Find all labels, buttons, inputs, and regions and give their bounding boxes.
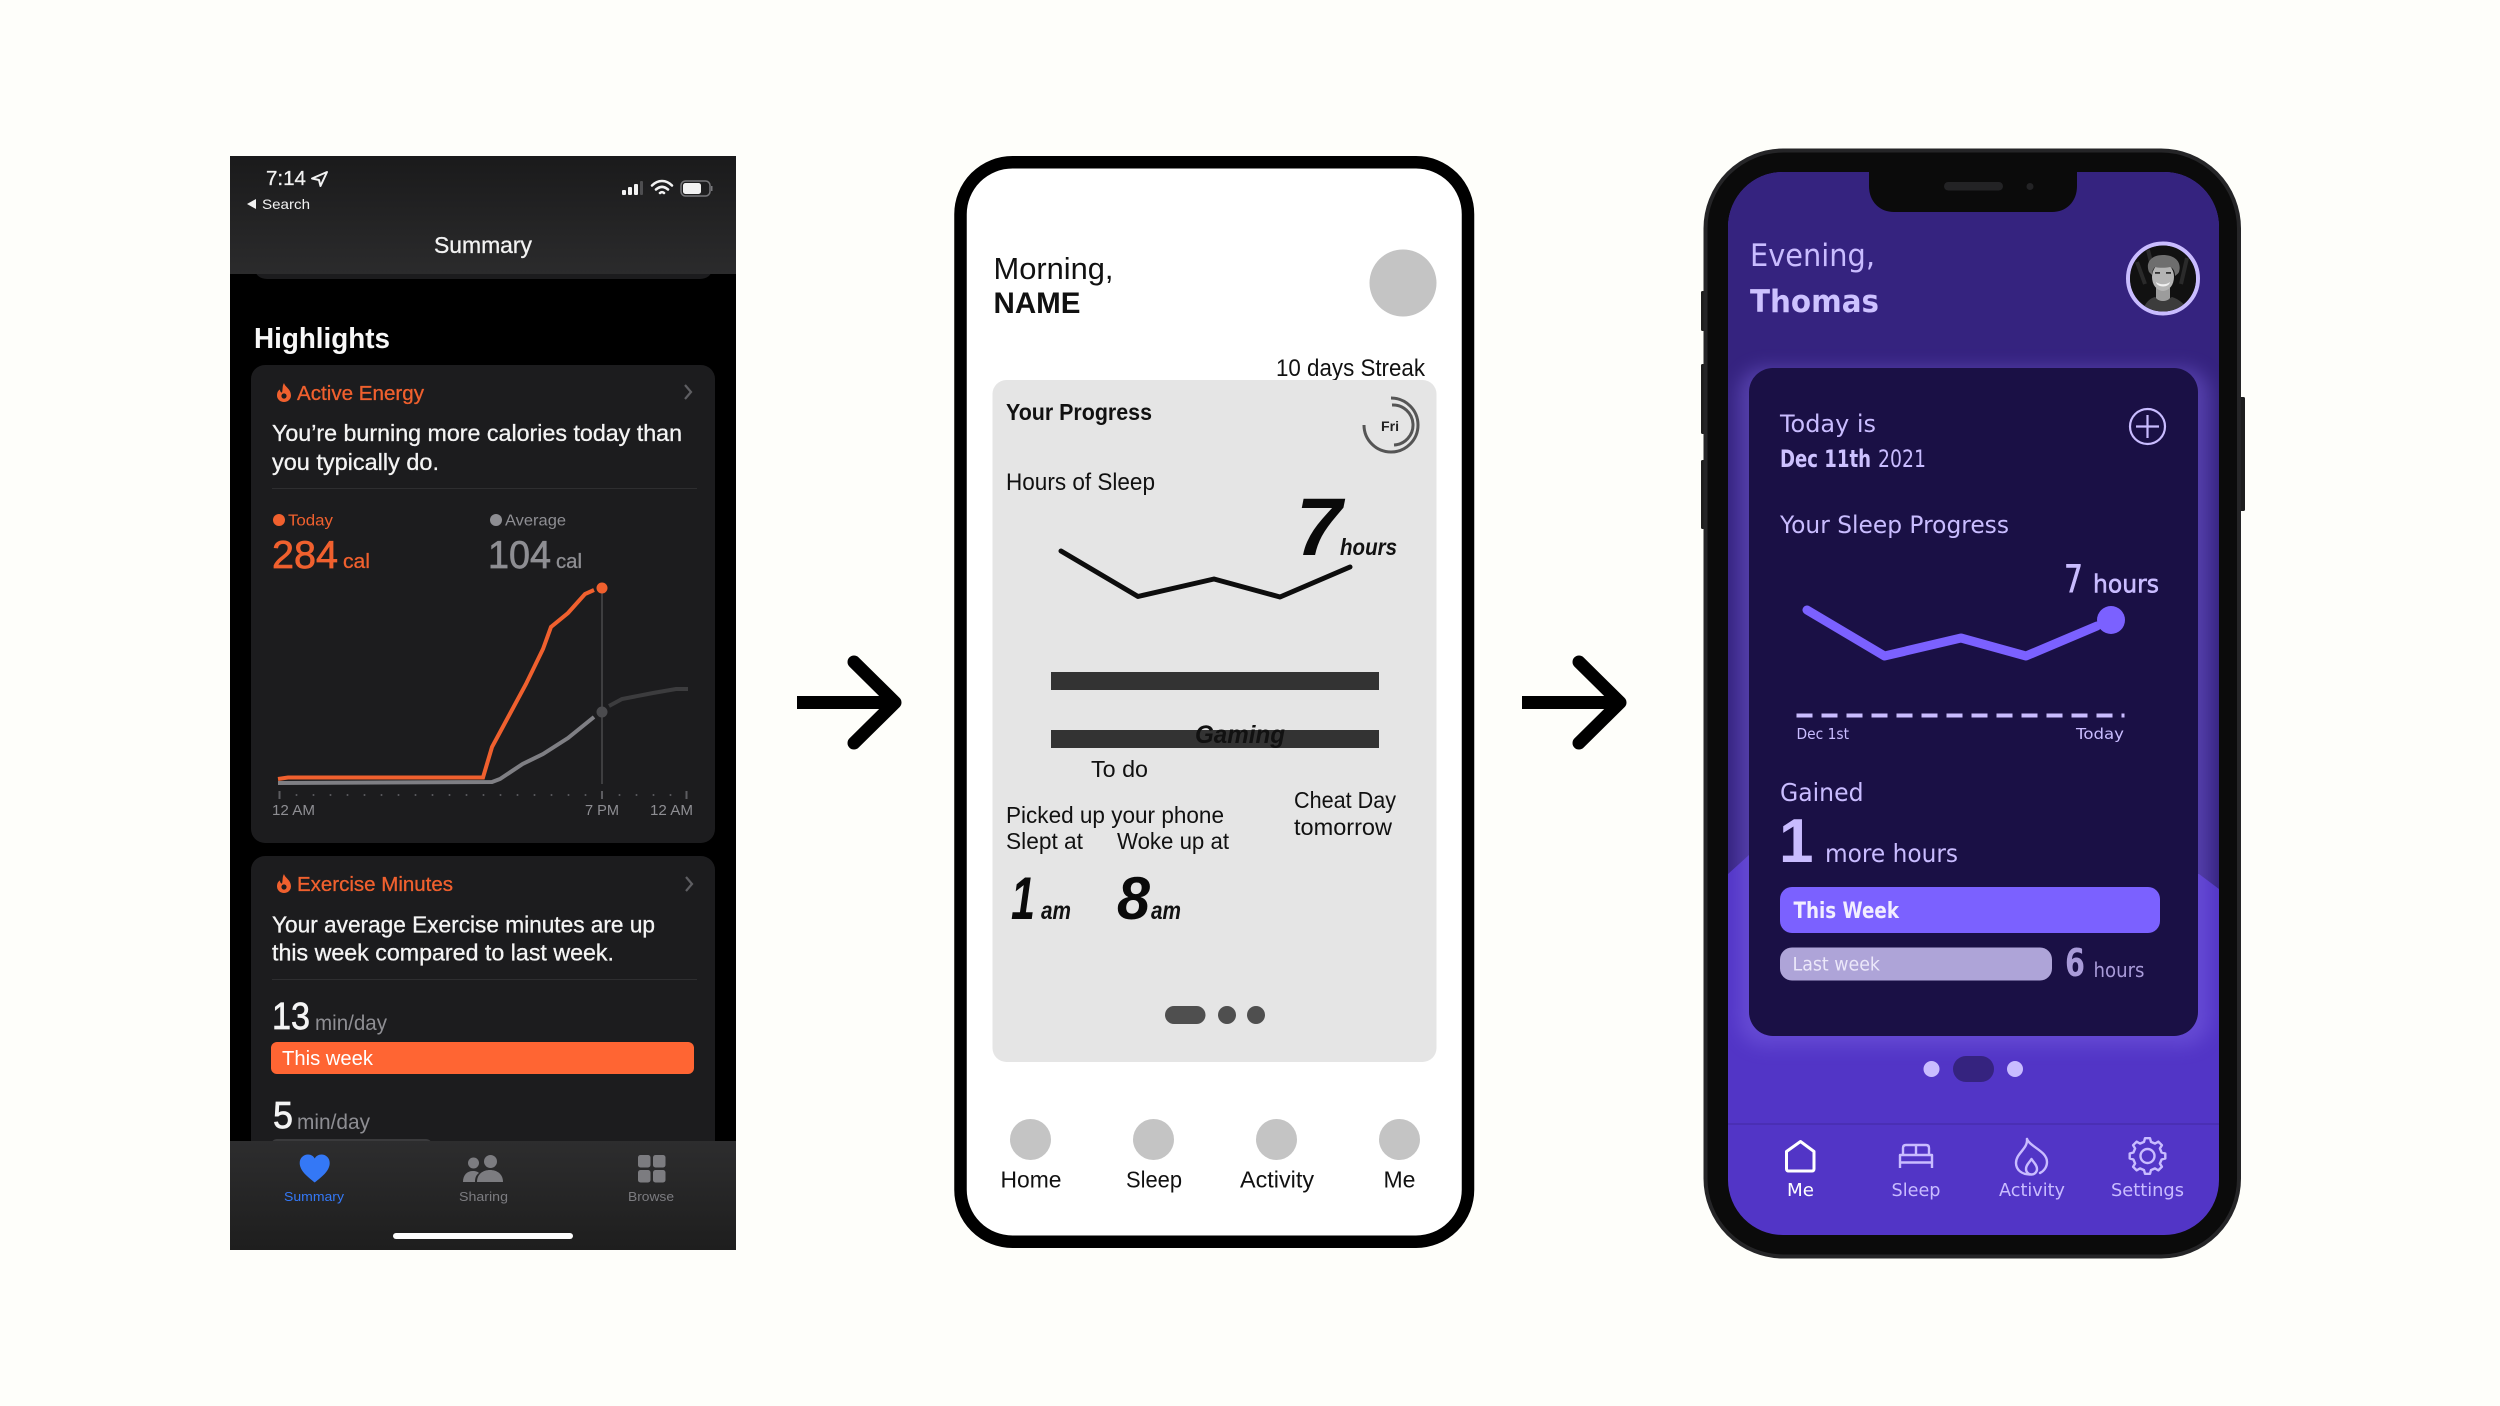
date <box>1779 410 1926 473</box>
heading: your progress: Your Progress <box>1006 399 1152 425</box>
stat: average: Average <box>505 512 566 530</box>
icon: day ring: Fri <box>1381 418 1399 434</box>
icon: day ring <box>1364 398 1418 452</box>
avatar placeholder <box>1370 250 1436 316</box>
nav: sleep: Sleep <box>1892 1180 1940 1201</box>
tab: summary: Summary <box>284 1189 345 1204</box>
text: exercise summary <box>272 912 655 966</box>
line chart: calories today vs average <box>272 582 693 819</box>
status: clock: 7:14 <box>266 168 306 190</box>
streak label: 10 days Streak <box>1276 355 1426 382</box>
icon: wifi <box>652 181 672 193</box>
icon: signal bars <box>622 181 643 195</box>
stat: seven hours: 7 <box>2064 558 2083 602</box>
stat: woke up at: am <box>1151 897 1181 925</box>
notch <box>1869 170 2077 212</box>
greeting: Morning, <box>994 251 1114 286</box>
stat: seven hours <box>1296 482 1397 573</box>
infographic canvas <box>230 148 2245 1258</box>
line chart: calories today vs average: 7 PM <box>585 802 619 819</box>
line chart: calories today vs average: 12 AM <box>650 802 693 819</box>
stat: woke up at <box>1117 828 1230 932</box>
icon: add <box>2130 409 2165 444</box>
bar: top <box>1051 672 1379 690</box>
pager dots <box>1924 1056 2023 1082</box>
stat: average: cal <box>556 551 582 573</box>
heading: exercise minutes: Exercise Minutes <box>297 874 453 896</box>
text: exercise summary: this week compared to last week. <box>272 940 614 966</box>
bar: gaming: Gaming <box>1195 721 1285 749</box>
nav: me <box>1379 1119 1420 1192</box>
status and navigation bar <box>230 156 736 279</box>
stat: gained: more hours <box>1825 839 1958 868</box>
icon: chevron <box>685 385 691 399</box>
text: cheat day: tomorrow <box>1294 814 1392 840</box>
greeting <box>1750 238 1879 320</box>
arrow: second to third phone <box>1522 662 1620 743</box>
stat: seven hours: 7 <box>1296 482 1345 573</box>
icon: chevron <box>686 877 692 891</box>
heading: highlights: Highlights <box>254 323 390 355</box>
side buttons <box>1701 291 2245 529</box>
icon: flame <box>277 874 291 893</box>
stat: this week: This week <box>282 1048 374 1070</box>
stat: average <box>490 514 581 569</box>
stat: this week: min/day <box>315 1012 387 1035</box>
stat: this week <box>271 996 694 1074</box>
nav: activity: Activity <box>1999 1180 2065 1201</box>
nav: me: Me <box>1787 1180 1814 1201</box>
stat: today: cal <box>343 551 370 573</box>
stat: last week: 5 <box>273 1095 293 1137</box>
stat: gained: 1 <box>1779 807 1813 876</box>
panel: progress <box>992 380 1436 1062</box>
text: calories summary: You’re burning more calories today than <box>272 420 682 446</box>
status: back to search: Search <box>262 196 310 212</box>
tab: summary <box>284 1154 345 1204</box>
text: exercise summary: Your average Exercise minutes are up <box>272 912 655 938</box>
stat: last week <box>272 1102 430 1141</box>
stat: slept at: Slept at <box>1006 828 1084 854</box>
tab: sharing <box>459 1155 508 1204</box>
phone 1: Apple Health summary screenshot <box>230 156 736 1276</box>
nav: home: Home <box>1000 1166 1062 1192</box>
stat: slept at: am <box>1041 897 1071 925</box>
text: cheat day: Cheat Day <box>1294 787 1396 813</box>
nav: activity <box>1999 1139 2065 1201</box>
stat: slept at <box>1006 828 1084 932</box>
arrow: first to second phone <box>797 662 895 743</box>
stat: six hours: hours <box>2094 958 2144 982</box>
nav: activity: Activity <box>1240 1166 1315 1192</box>
wireframe frame <box>960 162 1468 1242</box>
tab bar <box>230 1141 736 1250</box>
bar: last week <box>1780 948 2052 980</box>
date: Dec 11th <box>1780 445 1871 473</box>
nav: settings: Settings <box>2111 1180 2184 1201</box>
text: to do: To do <box>1091 756 1148 782</box>
tab: browse: Browse <box>628 1189 674 1204</box>
nav: me: Me <box>1384 1166 1416 1192</box>
line chart: sleep <box>1061 551 1350 597</box>
greeting: Evening, <box>1750 238 1875 274</box>
text: calories summary <box>272 420 682 475</box>
heading: summary: Summary <box>434 232 532 258</box>
stat: six hours: 6 <box>2065 941 2085 985</box>
stat: seven hours: hours <box>2093 570 2159 598</box>
date axis <box>1796 716 2124 743</box>
text: picked up phone: Picked up your phone <box>1006 802 1224 828</box>
stat: today: Today <box>288 512 333 530</box>
text: calories summary: you typically do. <box>272 449 439 475</box>
pager dots <box>1165 1006 1265 1024</box>
line chart: sleep <box>1807 606 2125 656</box>
stat: seven hours: hours <box>1340 534 1397 560</box>
screen <box>1728 172 2219 1235</box>
date: 2021 <box>1878 445 1926 473</box>
nav: sleep <box>1126 1119 1182 1192</box>
stat: today: 284 <box>272 534 338 577</box>
tab: browse <box>628 1155 674 1204</box>
icon: flame <box>277 383 291 402</box>
bar: this week <box>1780 887 2160 933</box>
date axis: Today <box>2075 725 2124 743</box>
avatar: portrait photo <box>2128 244 2198 315</box>
phone body <box>1706 150 2239 1256</box>
heading: active energy: Active Energy <box>297 383 424 405</box>
nav: settings <box>2111 1138 2184 1201</box>
card: active energy <box>251 365 715 843</box>
bar: this week: This Week <box>1794 899 1900 924</box>
icon: location arrow <box>312 172 327 186</box>
stat: gained: Gained <box>1780 778 1864 807</box>
stat: woke up at: Woke up at <box>1117 828 1230 854</box>
nav: sleep <box>1892 1145 1940 1201</box>
greeting <box>994 251 1114 320</box>
phone 2: wireframe <box>960 162 1468 1242</box>
stat: seven hours <box>2064 558 2159 602</box>
text: hours of sleep: Hours of Sleep <box>1006 469 1155 496</box>
tab: sharing: Sharing <box>459 1189 508 1204</box>
bar: last week: Last week <box>1792 954 1880 976</box>
stat: last week: min/day <box>297 1111 370 1134</box>
stat: woke up at: 8 <box>1117 865 1151 932</box>
greeting: NAME <box>994 287 1080 320</box>
status: back to search <box>247 199 310 209</box>
text: cheat day <box>1294 787 1396 840</box>
stat: slept at: 1 <box>1011 865 1035 932</box>
nav: activity <box>1240 1119 1315 1192</box>
date: Today is <box>1779 410 1876 438</box>
bar: gaming <box>1051 721 1379 749</box>
nav: sleep: Sleep <box>1126 1166 1182 1192</box>
nav: me <box>1786 1142 1814 1201</box>
heading: sleep progress: Your Sleep Progress <box>1779 511 2009 539</box>
greeting: Thomas <box>1750 284 1879 320</box>
icon: battery <box>681 181 712 196</box>
card: exercise minutes <box>251 856 715 1141</box>
nav: home <box>1000 1119 1062 1192</box>
stat: six hours <box>2065 941 2144 985</box>
panel: today card <box>1749 368 2198 1036</box>
line chart: calories today vs average: 12 AM <box>272 802 315 819</box>
phone 3: final design <box>1701 150 2245 1256</box>
stat: this week: 13 <box>272 996 310 1038</box>
stat: average: 104 <box>488 534 551 577</box>
stat: today <box>273 514 369 569</box>
date axis: Dec 1st <box>1796 725 1849 743</box>
stat: gained <box>1779 778 1958 876</box>
